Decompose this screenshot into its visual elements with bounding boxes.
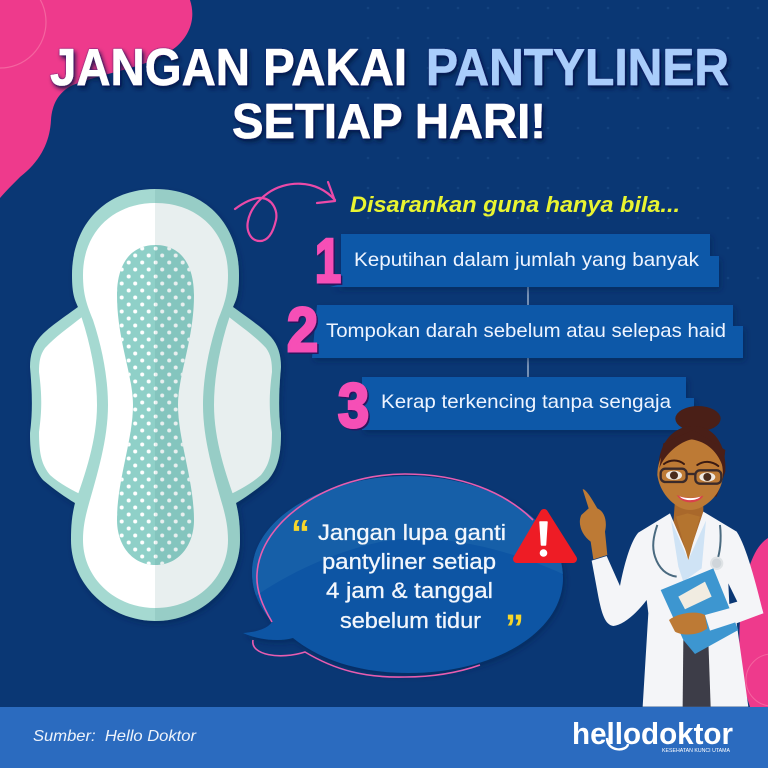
callout text: pantyliner setiap <box>322 549 496 574</box>
icon: pantyliner pad <box>30 180 285 630</box>
pad dotted core <box>117 245 194 565</box>
doctor hair <box>658 426 725 497</box>
footer band <box>0 707 768 768</box>
doctor eyebrows <box>664 460 718 466</box>
doctor hand on clipboard <box>669 613 707 635</box>
pink blob top-left <box>0 0 192 198</box>
doctor mouth <box>677 495 703 502</box>
doctor trousers <box>683 640 711 707</box>
icon: warning triangle <box>517 513 573 559</box>
callout text <box>318 520 506 633</box>
opening quote: “ <box>291 513 310 555</box>
source text: Sumber: Hello Doktor <box>33 728 197 745</box>
list item 1: 1 <box>315 227 341 296</box>
heading: recommendation: Disarankan guna hanya bila... <box>350 192 680 217</box>
list item 3: 3 <box>338 372 369 441</box>
closing quote: ” <box>505 608 524 650</box>
clipboard <box>661 568 738 654</box>
pad wings <box>30 307 281 503</box>
title: SETIAP HARI! <box>232 95 546 149</box>
title: JANGAN PAKAI <box>50 39 407 97</box>
doctor coat <box>592 512 763 707</box>
callout text: sebelum tidur <box>340 608 481 633</box>
pad body <box>71 189 240 621</box>
list item 1 <box>315 227 719 296</box>
list item 2: Tompokan darah sebelum atau selepas haid <box>326 320 726 342</box>
stethoscope <box>653 525 722 577</box>
arrow: curly pink <box>235 182 335 241</box>
doctor shirt <box>671 520 706 582</box>
doctor eyes <box>666 471 715 482</box>
callout text: 4 jam & tanggal <box>326 578 493 603</box>
doctor hair bun <box>675 406 721 431</box>
doctor glasses <box>661 469 721 484</box>
doctor face <box>657 439 723 510</box>
logo: hellodoktor: KESEHATAN KUNCI UTAMA <box>662 748 730 754</box>
doctor pointing hand <box>580 489 607 559</box>
connector lines <box>527 287 529 377</box>
doctor illustration <box>580 406 763 707</box>
list item 2 <box>287 296 743 365</box>
list item 2: 2 <box>287 296 318 365</box>
callout text: Jangan lupa ganti <box>318 520 506 545</box>
gap under arm <box>728 583 737 604</box>
title: PANTYLINER <box>426 39 729 97</box>
doctor neck <box>673 500 703 560</box>
callout: speech bubble <box>243 470 565 677</box>
list item 3: Kerap terkencing tanpa sengaja <box>381 391 671 413</box>
list item 1: Keputihan dalam jumlah yang banyak <box>354 249 699 271</box>
title <box>50 39 729 149</box>
pink blob right <box>739 538 768 707</box>
logo: hellodoktor: hellodoktor <box>572 716 733 751</box>
list item 3 <box>338 372 694 441</box>
